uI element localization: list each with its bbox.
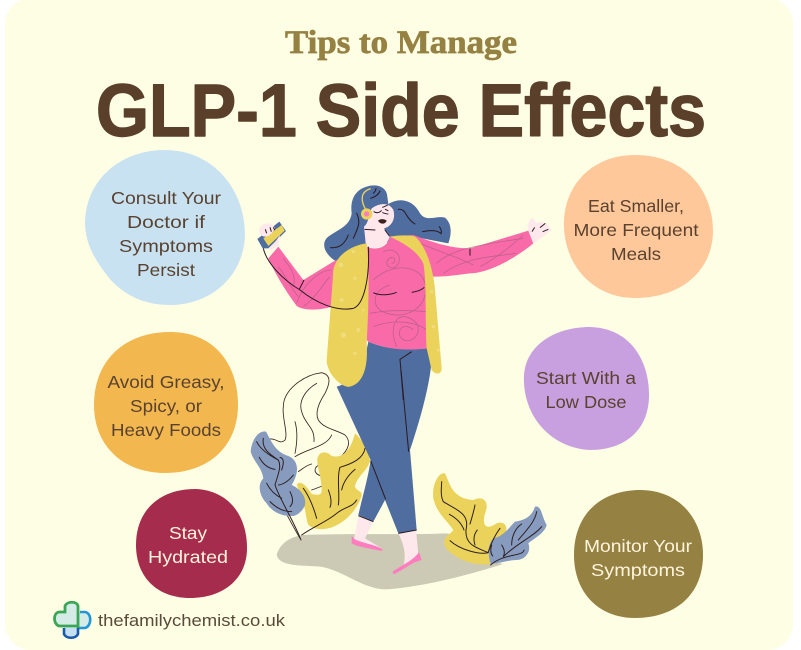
sweater: [268, 231, 533, 349]
tip blob: consult your doctor: Doctor if: [127, 212, 205, 232]
sweater scribbles: [278, 235, 523, 347]
heading: tips to manage: Tips to Manage: [285, 25, 517, 61]
plant veins right: [441, 482, 542, 565]
tip blob: eat smaller meals: More Frequent: [574, 220, 699, 240]
tip blob: start with a low dose: [524, 327, 649, 450]
earpiece: [361, 208, 372, 220]
earphone cable: [263, 247, 369, 309]
yellow leaf left: [297, 433, 370, 529]
tip blob: monitor your symptoms: [574, 490, 703, 618]
tip blob: avoid greasy foods: Spicy, or: [130, 396, 202, 416]
tip blob: start with a low dose: Start With a: [536, 368, 636, 388]
outlined white leaf: [261, 373, 349, 538]
tip blob: consult your doctor: Symptoms: [119, 236, 213, 256]
blue-grey leaf left: [251, 431, 305, 516]
title: GLP-1 side effects: GLP-1 Side Effects: [96, 69, 706, 152]
tip blob: stay hydrated: Hydrated: [148, 547, 228, 567]
face details: [365, 205, 389, 236]
tip blob: monitor your symptoms: Monitor Your: [584, 536, 692, 556]
hair: [324, 185, 451, 262]
tip blob: stay hydrated: [136, 489, 247, 598]
tip blob: avoid greasy foods: [94, 332, 238, 473]
tip blob: start with a low dose: Low Dose: [546, 392, 626, 412]
tip blob: eat smaller meals: [564, 155, 713, 298]
logo icon: [54, 601, 90, 639]
tip blob: stay hydrated: Stay: [169, 523, 207, 543]
trouser seams: [358, 370, 417, 533]
tip blob: avoid greasy foods: Avoid Greasy,: [108, 372, 224, 392]
tip blob: consult your doctor: Consult Your: [111, 188, 221, 208]
vest left panel: [327, 243, 369, 387]
ground shadow: [277, 533, 503, 589]
vest right panel: [390, 235, 442, 374]
hair strands: [331, 188, 441, 248]
raised hand right: [528, 218, 551, 243]
tip blob: eat smaller meals: Eat Smaller,: [588, 196, 684, 216]
illustration: ground and plants: [251, 373, 547, 589]
trousers: [337, 342, 431, 533]
mouth: [378, 219, 387, 224]
face and neck: [364, 204, 394, 248]
website url: thefamilychemist.co.uk: [98, 612, 286, 630]
yellow leaf right: [433, 473, 506, 564]
tip blob: monitor your symptoms: Symptoms: [591, 560, 685, 580]
tip blob: eat smaller meals: Meals: [611, 244, 661, 264]
plant veins left: [257, 438, 365, 540]
tip blob: avoid greasy foods: Heavy Foods: [111, 420, 221, 440]
illustration: woman dancing with headphones: [257, 185, 551, 574]
phone and hand: [257, 222, 286, 248]
headphones: [362, 189, 371, 210]
blue-grey leaf right: [489, 507, 547, 564]
body lines: [299, 248, 470, 400]
legs and feet: [337, 342, 431, 574]
socks: [353, 516, 418, 567]
tip blob: consult your doctor: Persist: [137, 260, 195, 280]
vest speckles: [339, 250, 440, 355]
shoes: [352, 536, 422, 574]
tip blob: consult your doctor: [85, 150, 245, 305]
